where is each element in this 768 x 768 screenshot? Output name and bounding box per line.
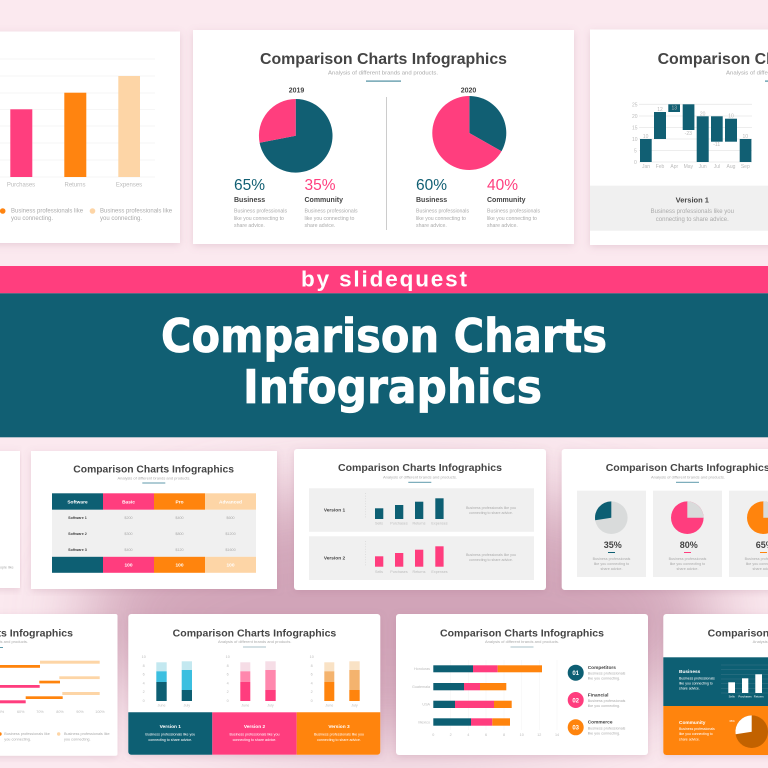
block: version 2: Business professionals like you — [230, 732, 279, 736]
stacked chart: orange: June — [325, 704, 333, 708]
pie chart: 2019 — [259, 87, 333, 173]
row: version 1: Purchases — [390, 522, 408, 526]
block: version 1: Business professionals like you — [145, 732, 195, 736]
legend: cream: Business professionals like — [100, 208, 173, 214]
waterfall chart: Sep — [741, 164, 750, 170]
item: 02 financial: Financial — [588, 692, 608, 698]
item: 03 commerce: like you connecting. — [588, 732, 620, 736]
comparison table: $120 — [175, 548, 184, 552]
item: 01 competitors: Competitors — [588, 665, 616, 671]
band: business — [663, 657, 768, 706]
stat: 2019 community: Community — [304, 197, 343, 204]
waterfall chart: 0 — [634, 160, 637, 166]
stacked horizontal bar chart: Guatemala — [412, 685, 431, 689]
band: business: share advice. — [679, 687, 700, 691]
stat: 2019 business: Business — [234, 197, 265, 204]
stacked chart: pink: 0 — [227, 699, 229, 703]
band: community — [663, 706, 768, 755]
range bars — [0, 661, 105, 714]
card: 80%: 80% — [680, 540, 698, 550]
legend: cream: you connecting. — [64, 738, 91, 742]
stacked chart: teal: 4 — [143, 681, 145, 685]
stat: 2020 community: share advice. — [487, 223, 518, 229]
waterfall chart: Jan — [642, 164, 650, 170]
version caption band: Business professionals like you — [651, 209, 734, 215]
range bars: 100% — [95, 710, 105, 714]
stacked chart: teal — [142, 655, 192, 708]
block: version 2: Version 2 — [244, 724, 265, 730]
panel: pie chart comparison slide (top centre) — [193, 30, 574, 244]
stacked chart: orange: 2 — [311, 690, 313, 694]
block: version 3: connecting to share advice. — [317, 738, 361, 742]
block: version 3 — [297, 712, 380, 755]
heading: Comparison Charts Infographics — [260, 51, 507, 68]
comparison table: $200 — [124, 516, 133, 520]
band: community: 35% — [729, 719, 735, 723]
stat: 2019 business — [234, 177, 287, 229]
row: version 1 — [309, 488, 534, 532]
card: 35%: 35% — [604, 540, 622, 550]
stat: 2020 business: Business professionals — [416, 208, 469, 214]
card: 35%: share advice. — [601, 567, 622, 571]
comparison table: 100 — [124, 562, 133, 568]
block: version 3: Business professionals like you — [314, 732, 364, 736]
waterfall chart: 20 — [632, 114, 638, 120]
subtitle: Analysis of different brands and products. — [328, 70, 438, 76]
comparison table: Software 3 — [68, 548, 87, 552]
comparison table: $800 — [175, 532, 184, 536]
waterfall chart: 20 — [700, 112, 706, 118]
stat: 2019 business: 65% — [234, 177, 265, 194]
waterfall chart: 13 — [672, 106, 677, 112]
subtitle: Analysis of different brands and products. — [651, 476, 725, 480]
stacked chart: teal: 2 — [143, 690, 145, 694]
panel: three pie cards slide — [562, 449, 768, 590]
stacked chart: pink: 10 — [226, 655, 230, 659]
block: version 1 — [128, 712, 212, 755]
version caption band: Version 1 — [676, 196, 709, 204]
stacked chart: orange: 10 — [310, 655, 314, 659]
panel: horizontal stacked bars slide — [396, 614, 648, 755]
stat: 2019 business: like you connecting to — [234, 216, 284, 222]
stacked chart: teal: 0 — [143, 699, 145, 703]
item: 01 competitors: like you connecting. — [588, 677, 620, 681]
subtitle: Analysis of different brands and products. — [383, 476, 457, 480]
legend: orange — [0, 732, 50, 742]
item: 02 financial: Business professionals — [588, 699, 626, 703]
bar chart: purchases returns expenses: Expenses — [116, 182, 142, 188]
waterfall chart: -11 — [713, 142, 720, 148]
card: 35% — [577, 491, 646, 577]
heading: Comparison Charts Infographics — [338, 462, 502, 474]
waterfall chart: Aug — [727, 164, 736, 170]
stacked chart: orange: 8 — [311, 664, 313, 668]
waterfall chart: Jun — [699, 164, 707, 170]
stacked chart: pink: 2 — [227, 690, 229, 694]
waterfall chart: 5 — [634, 148, 637, 154]
panel: stacked columns with three versions — [128, 614, 380, 755]
band: community: share advice. — [679, 738, 700, 742]
row: version 2: Returns — [413, 570, 426, 574]
pink banner: by slidequest: by slidequest — [301, 266, 468, 292]
band: community: Community — [679, 720, 706, 726]
band: business: Returns — [754, 694, 764, 698]
comparison table: Advanced — [219, 500, 242, 506]
stacked horizontal bar chart: Mexico — [418, 720, 430, 724]
comparison table — [52, 493, 256, 573]
band: business: Sells — [729, 694, 735, 698]
teal banner: main title: Comparison Charts — [161, 309, 607, 363]
range bars: 70% — [36, 710, 44, 714]
legend: cream — [90, 208, 173, 222]
range bars: 60% — [17, 710, 25, 714]
panel: bar chart slide (top left) — [0, 32, 180, 243]
legend: cream — [57, 732, 110, 742]
row: version 2 — [309, 536, 534, 580]
stacked chart: orange: 6 — [311, 673, 313, 677]
pie chart: 2020: 2020 — [461, 87, 476, 94]
row: version 2: Version 2 — [324, 555, 345, 561]
stacked horizontal bar chart — [412, 660, 559, 737]
comparison table: $1600 — [225, 548, 236, 552]
bar chart: purchases returns expenses — [0, 59, 155, 188]
stacked horizontal bar chart: 2 — [450, 733, 452, 737]
item: 01 competitors: Business professionals — [588, 672, 626, 676]
item: 03 commerce: Business professionals — [588, 726, 626, 730]
heading: Comparison Charts Infographics — [173, 628, 336, 640]
item: 03 commerce: 03 — [572, 726, 580, 732]
heading: Comparison Charts Infographics — [440, 628, 604, 640]
comparison table: $1200 — [225, 532, 236, 536]
legend: orange: Business professionals like — [11, 208, 84, 214]
item: 02 financial: 02 — [572, 698, 580, 704]
band: business: Business — [679, 669, 701, 675]
panel: business and community slide (bottom right) — [663, 614, 768, 755]
comparison table: Pro — [176, 500, 184, 506]
band: business: like you connecting to — [679, 682, 713, 686]
heading: Comparison Charts Infographics — [73, 464, 234, 476]
row: version 1: Version 1 — [324, 508, 345, 514]
stacked horizontal bar chart: 12 — [537, 733, 541, 737]
legend: cream: you connecting. — [100, 216, 142, 222]
stacked horizontal bar chart: 8 — [503, 733, 505, 737]
comparison table: 100 — [175, 562, 184, 568]
stat: 2020 business — [416, 177, 469, 229]
waterfall chart: 12 — [657, 107, 663, 113]
waterfall chart: 10 — [643, 134, 649, 140]
stat: 2019 community — [304, 177, 358, 229]
legend: orange: Business professionals like — [4, 732, 50, 736]
pink banner: by slidequest — [0, 266, 768, 293]
version caption band — [590, 186, 768, 231]
version caption band: connecting to share advice. — [656, 217, 729, 223]
range bars: 90% — [76, 710, 84, 714]
subtitle: Analysis of different brands and products. — [485, 640, 559, 644]
legend: orange: you connecting. — [11, 216, 53, 222]
waterfall chart: May — [684, 164, 694, 170]
stat: 2020 community — [487, 177, 540, 229]
band: community: like you connecting to — [679, 732, 713, 736]
row: version 1: connecting to share advice. — [469, 511, 513, 515]
stat: 2020 community: like you connecting to — [487, 216, 537, 222]
subtitle: Analysis of different brands and products. — [118, 476, 190, 480]
comparison table: $600 — [226, 516, 235, 520]
row: version 1: Expenses — [431, 522, 448, 526]
waterfall chart: Feb — [656, 164, 665, 170]
stacked chart: pink: 4 — [227, 681, 229, 685]
waterfall chart: 15 — [632, 126, 638, 132]
card: 80%: share advice. — [677, 567, 698, 571]
card: 80%: like you connecting to — [670, 562, 705, 566]
card: 35%: Business professionals — [593, 557, 631, 561]
stat: 2020 business: Business — [416, 197, 447, 204]
comparison table: $400 — [124, 548, 133, 552]
stat: 2019 community: like you connecting to — [304, 216, 355, 222]
block: version 1: connecting to share advice. — [148, 738, 192, 742]
stacked horizontal bar chart: 4 — [467, 733, 469, 737]
stat: 2020 business: share advice. — [416, 223, 447, 229]
waterfall chart: 10 — [632, 137, 638, 143]
heading: Comparison Charts Infographics — [606, 462, 768, 474]
stacked horizontal bar chart: 10 — [520, 733, 524, 737]
stat: 2020 business: 60% — [416, 177, 447, 194]
bar chart: purchases returns expenses: Purchases — [7, 182, 35, 188]
waterfall chart: Apr — [670, 164, 679, 170]
small panel: partial slide (middle left edge) — [0, 451, 20, 588]
stat: 2020 community: Community — [487, 197, 526, 204]
stat: 2019 community: share advice. — [304, 223, 335, 229]
stacked horizontal bar chart: 6 — [485, 733, 487, 737]
legend: orange — [0, 208, 84, 222]
comparison table: $300 — [124, 532, 133, 536]
panel: comparison table slide — [31, 451, 277, 589]
row: version 1: Returns — [413, 522, 426, 526]
stacked chart: teal: June — [158, 704, 166, 708]
range bars: 80% — [56, 710, 64, 714]
band: business: Purchases — [738, 694, 752, 698]
stacked chart: teal: 10 — [142, 655, 146, 659]
waterfall chart: 10 — [743, 134, 748, 140]
row: version 2: Business professionals like you — [466, 553, 516, 557]
teal banner: main title: Infographics — [243, 360, 542, 414]
stacked horizontal bar chart: USA — [422, 703, 431, 707]
waterfall chart: -23 — [685, 131, 692, 137]
comparison table: $400 — [175, 516, 184, 520]
pie chart: 2019: 2019 — [289, 87, 304, 94]
stacked horizontal bar chart: 0 — [432, 733, 434, 737]
card: 80%: Business professionals — [669, 557, 707, 561]
stat: 2020 business: like you connecting to — [416, 216, 466, 222]
row: version 2: connecting to share advice. — [469, 558, 513, 562]
small panel: partial slide (middle left edge): ople like — [0, 566, 14, 570]
stacked chart: pink — [226, 655, 276, 708]
teal banner: main title — [0, 293, 768, 437]
row: version 2: Expenses — [431, 570, 448, 574]
stat: 2020 community: 40% — [487, 177, 518, 194]
stacked chart: orange — [310, 655, 360, 708]
waterfall chart: 25 — [632, 102, 638, 108]
stacked chart: teal: July — [184, 704, 190, 708]
card: 35%: like you connecting to — [594, 562, 629, 566]
stacked chart: teal: 8 — [143, 664, 145, 668]
card: 65% — [729, 491, 768, 577]
stat: 2019 community: 35% — [304, 177, 336, 194]
bar chart: purchases returns expenses: Returns — [64, 182, 86, 188]
stacked chart: teal: 6 — [143, 673, 145, 677]
stacked chart: orange: 0 — [311, 699, 313, 703]
stacked chart: pink: July — [267, 704, 274, 708]
stacked horizontal bar chart: 14 — [555, 733, 559, 737]
band: business: Business professionals — [679, 677, 715, 681]
comparison table: Basic — [122, 500, 135, 506]
waterfall chart: Jul — [714, 164, 720, 170]
stacked horizontal bar chart: Honduras — [414, 667, 430, 671]
stacked chart: pink: 8 — [227, 664, 229, 668]
card: 80% — [653, 491, 722, 577]
waterfall chart: 10 — [728, 114, 734, 120]
row: version 1: Business professionals like you — [466, 506, 516, 510]
row: version 1: Sells — [375, 522, 383, 526]
stat: 2019 community: Business professionals — [304, 208, 358, 214]
stacked chart: orange: 4 — [311, 681, 313, 685]
row: version 2: Sells — [375, 570, 383, 574]
panel: range bar chart slide (bottom left) — [0, 614, 118, 756]
band: community: Business professionals — [679, 727, 715, 731]
stacked chart: pink: June — [241, 704, 249, 708]
item: 03 commerce: Commerce — [588, 720, 613, 726]
waterfall chart — [632, 102, 752, 170]
item: 01 competitors — [568, 665, 626, 681]
comparison table: Software — [67, 500, 88, 506]
item: 02 financial — [568, 692, 626, 708]
stat: 2020 community: Business professionals — [487, 208, 540, 214]
block: version 3: Version 3 — [328, 724, 350, 730]
panel: two version bar charts slide — [294, 449, 546, 590]
stacked chart: orange: July — [351, 704, 358, 708]
comparison table: Software 2 — [68, 532, 87, 536]
item: 02 financial: like you connecting. — [588, 704, 620, 708]
row: version 2: Purchases — [390, 570, 408, 574]
item: 01 competitors: 01 — [572, 671, 580, 677]
block: version 2: connecting to share advice. — [233, 738, 276, 742]
comparison table: Software 1 — [68, 516, 87, 520]
legend: cream: Business professionals like — [64, 732, 110, 736]
panel: waterfall chart slide (top right) — [590, 30, 768, 245]
block: version 2 — [212, 712, 297, 755]
comparison table: 100 — [226, 562, 235, 568]
pie chart: 2020 — [432, 87, 506, 170]
stacked chart: pink: 6 — [227, 673, 229, 677]
subtitle: Analysis of different brands and products. — [218, 640, 292, 644]
stat: 2019 business: share advice. — [234, 223, 265, 229]
legend: orange: you connecting. — [4, 738, 31, 742]
block: version 1: Version 1 — [160, 724, 181, 730]
stat: 2019 business: Business professionals — [234, 208, 287, 214]
item: 03 commerce — [568, 719, 626, 736]
